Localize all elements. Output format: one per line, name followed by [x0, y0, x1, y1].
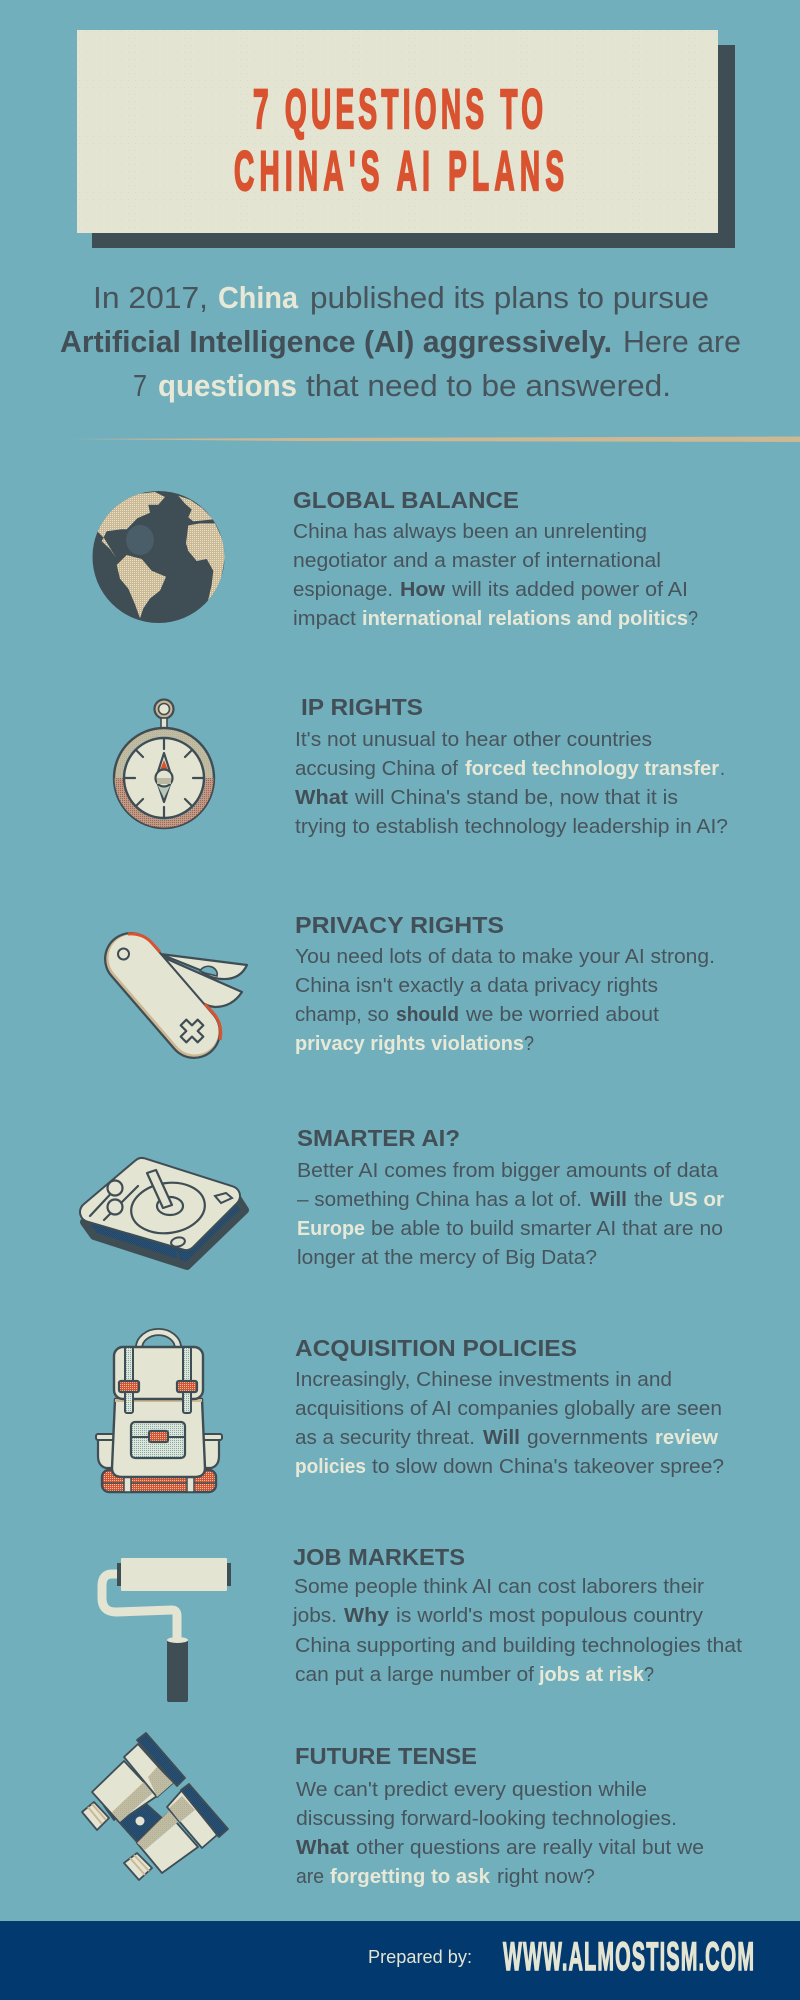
icon: swiss army knife: [118, 934, 247, 1048]
intro text: that need to be answered.: [306, 368, 671, 403]
title: [234, 79, 564, 203]
body text: impact: [293, 607, 356, 630]
body text: ?: [688, 607, 698, 630]
body text: China supporting and building technologies that: [295, 1634, 742, 1657]
body text: will China's stand be, now that it is: [354, 786, 678, 809]
section: job markets: [102, 1544, 742, 1702]
title: 7 QUESTIONS TO: [253, 79, 543, 141]
footer: [0, 1921, 800, 2000]
intro text: [60, 280, 741, 403]
body text: China has always been an unrelenting: [293, 520, 647, 543]
body text: forced technology transfer: [465, 757, 719, 780]
body text: discussing forward-looking technologies.: [296, 1807, 677, 1830]
body text: is world's most populous country: [396, 1604, 704, 1627]
body text: Will: [590, 1188, 627, 1211]
body text: will its added power of AI: [451, 578, 688, 601]
body text: review: [655, 1426, 718, 1449]
body text: as a security threat.: [295, 1426, 475, 1449]
section: global balance: [92, 487, 698, 630]
body text: Some people think AI can cost laborers their: [294, 1575, 704, 1598]
heading: PRIVACY RIGHTS: [295, 912, 504, 938]
body text: What: [295, 786, 348, 809]
body text: [297, 1159, 724, 1269]
body text: be able to build smarter AI that are no: [371, 1217, 723, 1240]
heading: SMARTER AI?: [297, 1125, 460, 1151]
body text: [295, 1368, 724, 1478]
icon: turntable: [84, 1168, 245, 1266]
body text: to slow down China's takeover spree?: [372, 1455, 724, 1478]
title: CHINA'S AI PLANS: [234, 141, 564, 203]
heading: IP RIGHTS: [301, 694, 423, 720]
icon: compass: [114, 700, 214, 828]
body text: Better AI comes from bigger amounts of data: [297, 1159, 719, 1182]
body text: – something China has a lot of.: [297, 1188, 582, 1211]
body text: negotiator and a master of international: [293, 549, 661, 572]
intro text: questions: [158, 368, 297, 403]
body text: privacy rights violations: [295, 1032, 524, 1055]
body text: are: [296, 1865, 324, 1888]
body text: champ, so: [295, 1003, 389, 1026]
website: WWW.ALMOSTISM.COM: [503, 1933, 754, 1979]
body text: other questions are really vital but we: [356, 1836, 704, 1859]
intro text: Artificial Intelligence (AI) aggressively.: [60, 324, 612, 359]
title card: [77, 30, 735, 248]
body text: [295, 728, 728, 838]
body text: policies: [295, 1455, 366, 1478]
icon: backpack: [96, 1332, 222, 1492]
icon: paint roller: [102, 1558, 231, 1702]
body text: jobs.: [292, 1604, 337, 1627]
body text: forgetting to ask: [330, 1865, 491, 1888]
body text: You need lots of data to make your AI strong.: [295, 945, 715, 968]
card shadow: [92, 45, 735, 248]
heading: FUTURE TENSE: [295, 1743, 477, 1769]
body text: China isn't exactly a data privacy rights: [295, 974, 658, 997]
section: acquisition policies: [96, 1332, 724, 1492]
body text: ?: [644, 1663, 654, 1686]
body text: governments: [527, 1426, 648, 1449]
card panel: [77, 30, 718, 233]
body text: espionage.: [293, 578, 393, 601]
intro text: In 2017,: [93, 280, 208, 315]
body text: should: [396, 1003, 459, 1026]
body text: Increasingly, Chinese investments in and: [295, 1368, 672, 1391]
body text: jobs at risk: [538, 1663, 645, 1686]
body text: [296, 1778, 704, 1888]
body text: Will: [483, 1426, 520, 1449]
icon: binoculars: [82, 1733, 228, 1880]
body text: right now?: [497, 1865, 595, 1888]
body text: What: [296, 1836, 349, 1859]
body text: acquisitions of AI companies globally are seen: [295, 1397, 722, 1420]
icon: globe: [92, 491, 225, 623]
body text: accusing China of: [295, 757, 458, 780]
body text: longer at the mercy of Big Data?: [297, 1246, 597, 1269]
intro text: Here are: [623, 324, 741, 359]
body text: [295, 945, 715, 1055]
body text: Europe: [297, 1217, 365, 1240]
intro text: published its plans to pursue: [310, 280, 709, 315]
body text: [292, 1575, 742, 1686]
body text: It's not unusual to hear other countries: [295, 728, 652, 751]
heading: GLOBAL BALANCE: [293, 487, 519, 513]
body text: Why: [344, 1604, 390, 1627]
body text: .: [720, 757, 725, 780]
body text: we be worried about: [465, 1003, 659, 1026]
section: smarter ai: [84, 1125, 724, 1269]
section: ip rights: [114, 694, 728, 838]
body text: ?: [524, 1032, 534, 1055]
section: future tense: [82, 1733, 704, 1888]
body text: the: [634, 1188, 663, 1211]
intro text: China: [218, 280, 299, 315]
section: privacy rights: [118, 912, 715, 1055]
body text: We can't predict every question while: [296, 1778, 647, 1801]
body text: [293, 520, 698, 630]
body text: How: [400, 578, 445, 601]
body text: can put a large number of: [295, 1663, 534, 1686]
intro text: 7: [133, 368, 147, 403]
body text: US or: [669, 1188, 724, 1211]
heading: JOB MARKETS: [293, 1544, 465, 1570]
heading: ACQUISITION POLICIES: [295, 1335, 577, 1361]
body text: international relations and politics: [362, 607, 688, 630]
prepared by label: Prepared by:: [368, 1947, 472, 1967]
body text: trying to establish technology leadership in AI?: [295, 815, 728, 838]
